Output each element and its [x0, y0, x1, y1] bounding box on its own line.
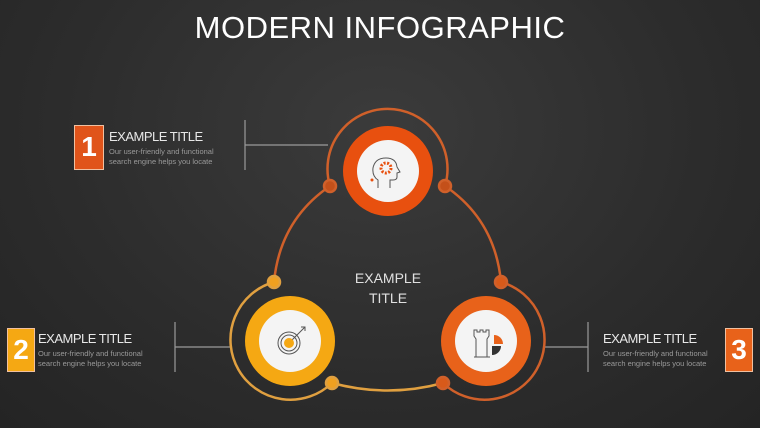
number box 3 [725, 328, 753, 372]
text 1: EXAMPLE TITLE [109, 129, 203, 144]
center text: TITLE [369, 290, 407, 306]
text 1: Our user-friendly and functional [109, 147, 214, 156]
text 1 [109, 129, 214, 166]
label 1 [74, 125, 214, 170]
text 2: EXAMPLE TITLE [38, 331, 132, 346]
text 2 [38, 331, 143, 368]
label 3 [603, 328, 753, 372]
nodes [268, 180, 507, 389]
connector lines [175, 120, 588, 372]
center text: EXAMPLE [355, 270, 421, 286]
text 3 [603, 331, 708, 368]
icon: chess rook chart [474, 330, 490, 357]
number box 2: 2 [13, 334, 29, 365]
title: MODERN INFOGRAPHIC [195, 10, 565, 45]
text 1: search engine helps you locate [109, 157, 212, 166]
text 2: search engine helps you locate [38, 359, 141, 368]
icon: head gear [373, 158, 400, 188]
text 3: Our user-friendly and functional [603, 349, 708, 358]
number box 3: 3 [731, 334, 747, 365]
number box 2 [7, 328, 35, 372]
label 2 [7, 328, 143, 372]
center text [355, 270, 421, 306]
circle 3 [441, 296, 531, 386]
text 2: Our user-friendly and functional [38, 349, 143, 358]
text 3: search engine helps you locate [603, 359, 706, 368]
number box 1: 1 [81, 131, 97, 162]
number box 1 [74, 125, 104, 170]
triangle arcs [230, 109, 545, 400]
text 3: EXAMPLE TITLE [603, 331, 697, 346]
circle 2 [245, 296, 335, 386]
icon: target [278, 327, 305, 354]
circle 1 [343, 126, 433, 216]
